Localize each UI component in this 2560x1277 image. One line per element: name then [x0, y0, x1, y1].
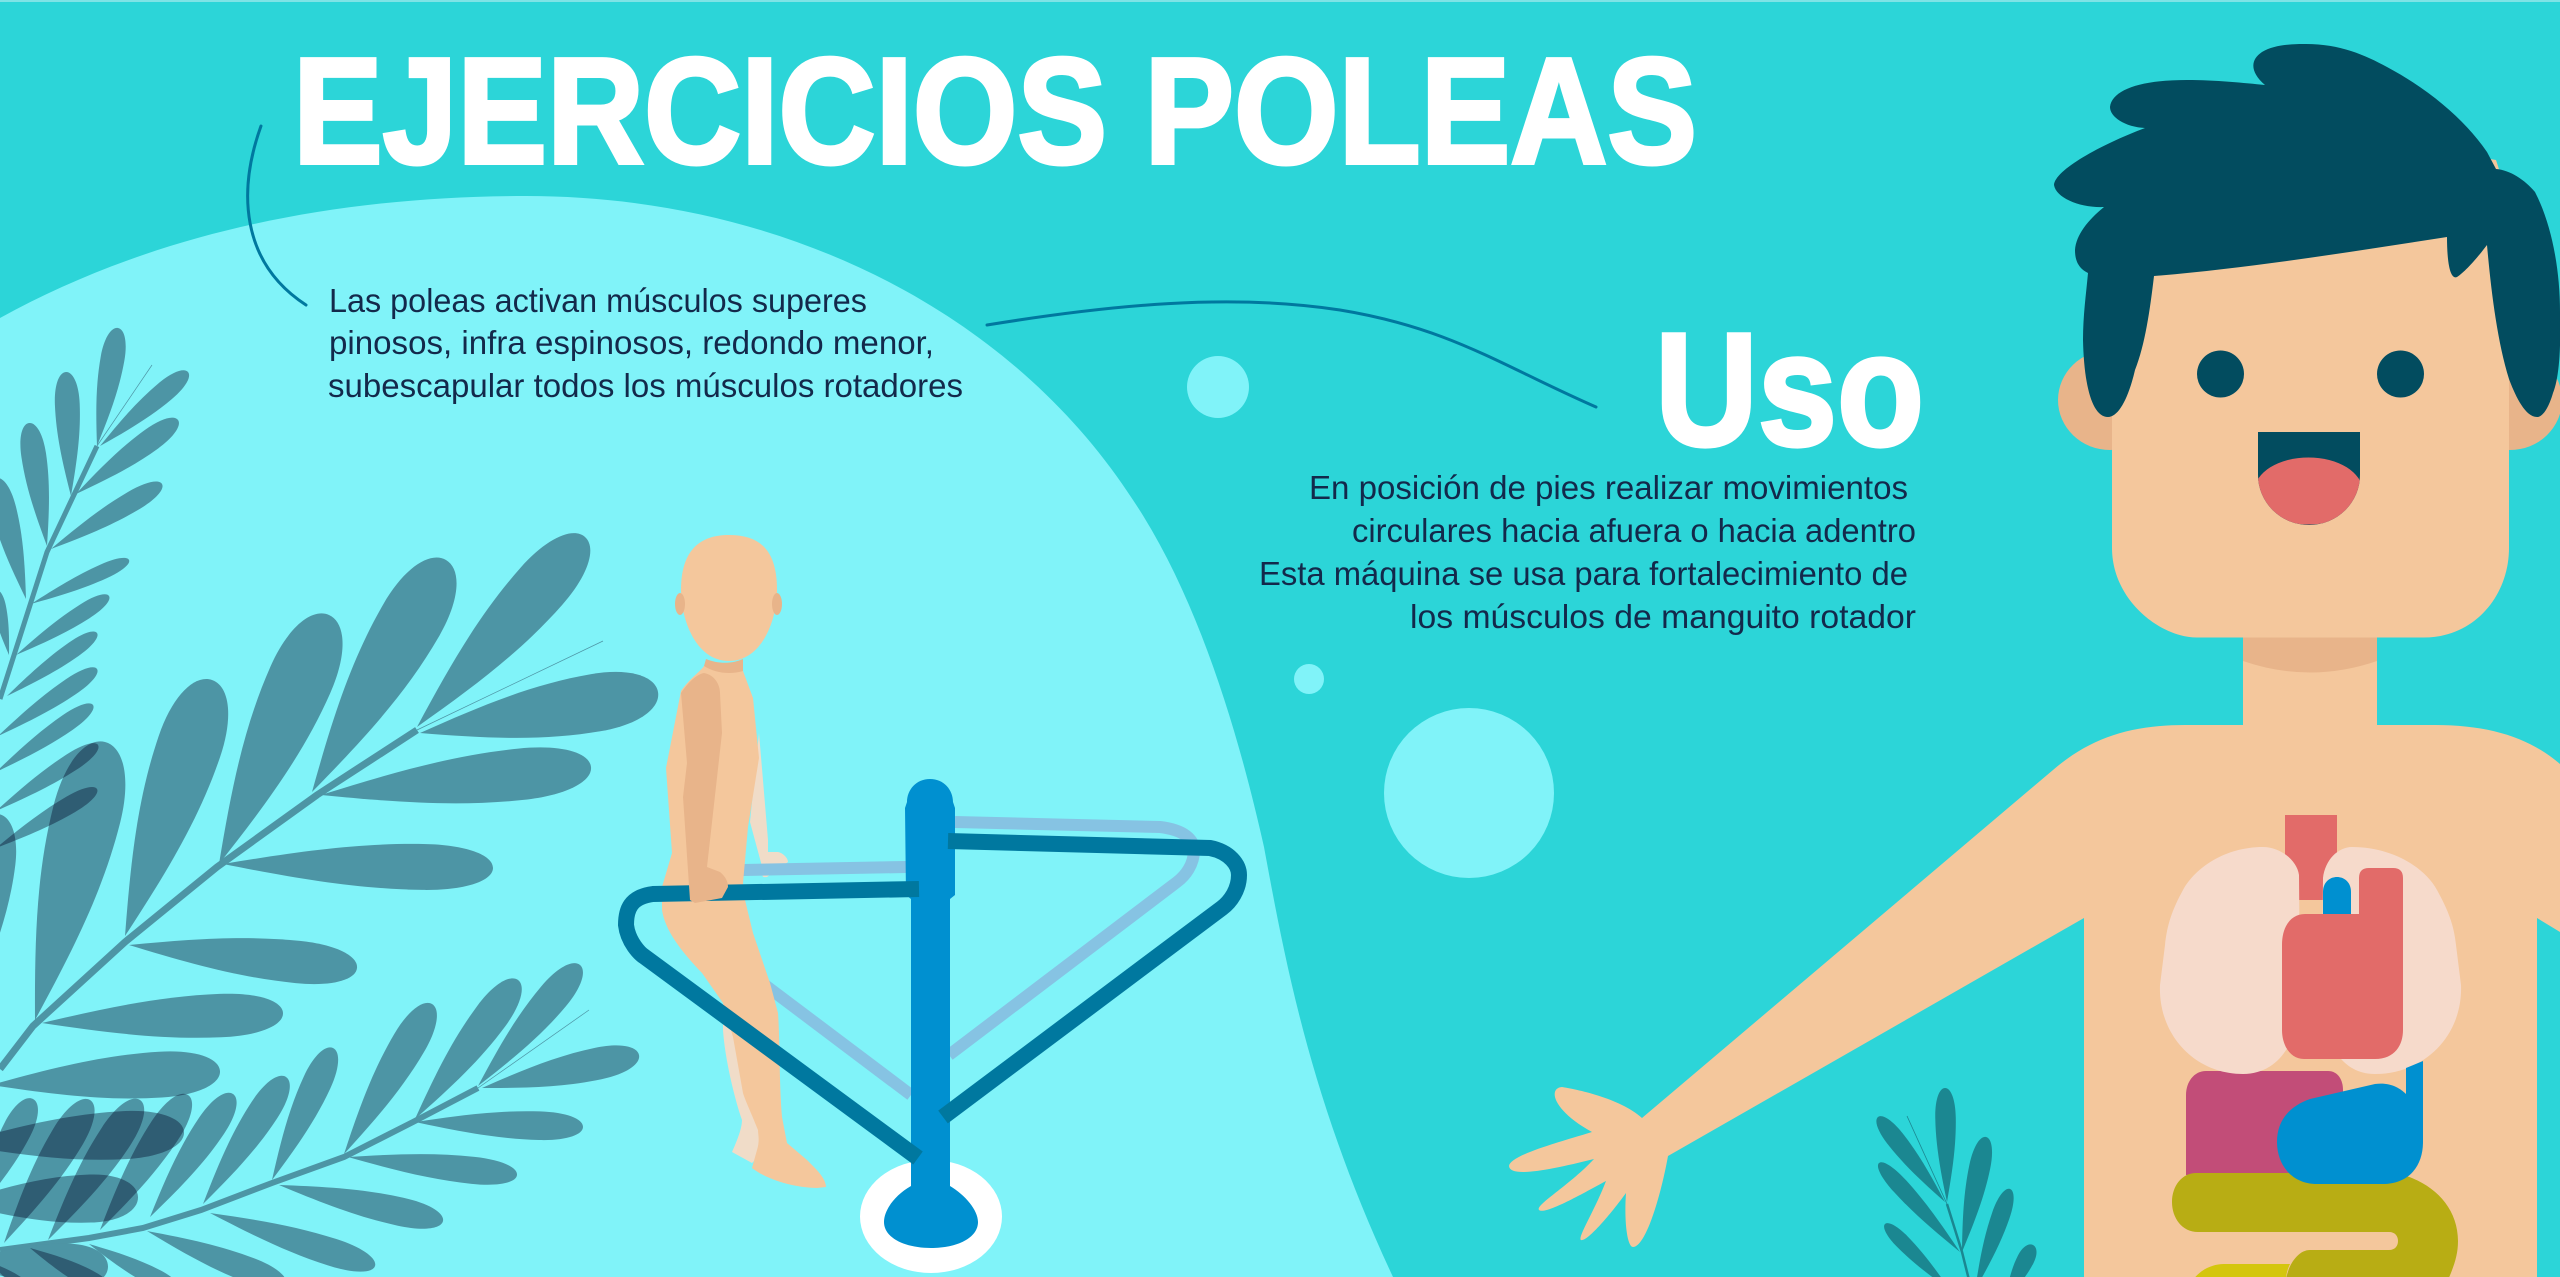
- machine base ring: [860, 1160, 1002, 1273]
- fern corner leaves: [0, 1240, 114, 1277]
- organ: trachea: [2285, 815, 2337, 900]
- light blob panel: [0, 196, 1393, 1277]
- curved connector: uso heading: [987, 302, 1596, 407]
- uso paragraph: los músculos de manguito rotador: [1410, 598, 1916, 635]
- intro paragraph: [328, 282, 963, 404]
- uso paragraph: En posición de pies realizar movimientos: [1309, 469, 1908, 506]
- curved connector: intro text: [248, 126, 306, 305]
- fern branch: large middle: [0, 518, 663, 1227]
- person neck shade: [704, 659, 743, 673]
- small plant: [1871, 1088, 2041, 1277]
- man character: [1509, 44, 2560, 1277]
- person head: [681, 535, 777, 661]
- uso paragraph: circulares hacia afuera o hacia adentro: [1352, 512, 1916, 549]
- man body and arm: [1509, 600, 2560, 1277]
- pulley machine with person: [626, 535, 1239, 1273]
- fern branch: upper left: [0, 326, 195, 856]
- man neck shade: [2243, 630, 2377, 672]
- man face: [2112, 110, 2509, 638]
- intro paragraph: pinosos, infra espinosos, redondo menor,: [329, 324, 934, 361]
- intro paragraph: subescapular todos los músculos rotadores: [328, 367, 963, 404]
- organ: blue vessel: [2323, 877, 2351, 920]
- machine front bars: [626, 841, 1239, 1158]
- person body: [662, 666, 826, 1188]
- organ: intestine: [2172, 1173, 2458, 1277]
- organ: heart: [2282, 868, 2403, 1059]
- uso paragraph: Esta máquina se usa para fortalecimiento de: [1259, 555, 1908, 592]
- organ: right lung: [2322, 847, 2461, 1074]
- title: EJERCICIOS POLEAS: [293, 26, 1697, 195]
- intro paragraph: Las poleas activan músculos superes: [329, 282, 867, 319]
- person front arm: [681, 673, 728, 903]
- man eyes: [2197, 350, 2424, 398]
- fern branch: lower: [0, 955, 642, 1277]
- machine post: [884, 779, 978, 1248]
- decorative bubbles: [1187, 356, 1554, 878]
- person back arm and leg: [723, 733, 788, 1163]
- man ears: [2058, 350, 2560, 450]
- uso paragraph: [1259, 469, 1916, 635]
- person ears: [675, 593, 782, 615]
- organ: lower intestine: [2193, 1264, 2290, 1277]
- organ: liver: [2186, 1071, 2343, 1175]
- man mouth: [2254, 432, 2362, 525]
- man hair: [2054, 44, 2560, 417]
- machine back bars: [743, 822, 1194, 1095]
- organ: left lung: [2160, 847, 2300, 1074]
- organ: stomach: [2277, 1061, 2423, 1184]
- uso heading: Uso: [1655, 300, 1924, 480]
